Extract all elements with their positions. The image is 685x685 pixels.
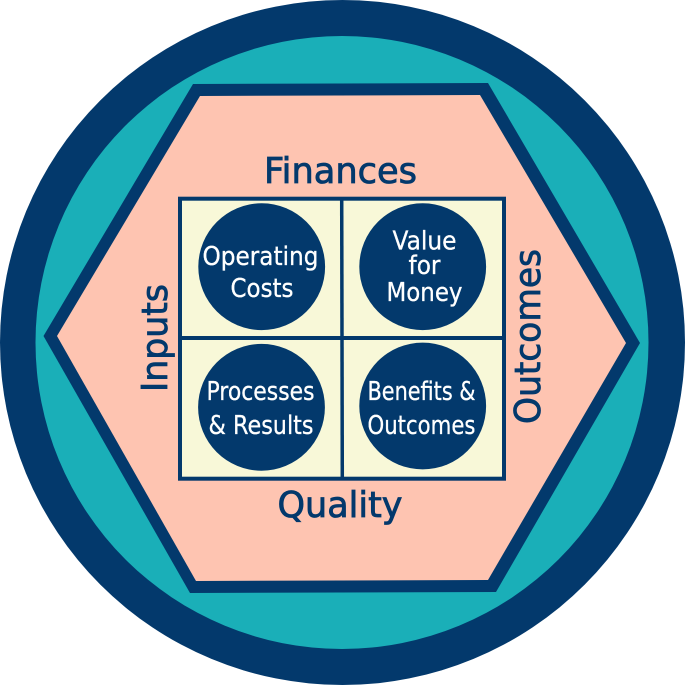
quadrant: Benefits & Outcomes: Outcomes — [368, 411, 476, 441]
quadrant: Benefits & Outcomes: Benefits & — [368, 377, 476, 407]
heading: Finances: Finances — [264, 151, 417, 192]
hexagon border — [44, 83, 640, 593]
quadrant: Operating Costs — [198, 203, 325, 330]
quadrant: Processes & Results — [198, 344, 325, 471]
quadrant: Processes & Results: & Results — [208, 411, 314, 441]
quadrant: Processes & Results: Processes — [206, 377, 314, 407]
quadrant: Value for Money — [359, 203, 486, 330]
quadrant: Operating Costs: Costs — [230, 274, 294, 304]
quadrant: Operating Costs: Operating — [202, 242, 318, 272]
quadrant: Benefits & Outcomes — [359, 343, 486, 469]
heading: Inputs: Inputs — [135, 284, 176, 392]
quadrant: Value for Money: Money — [386, 278, 462, 308]
heading: Outcomes: Outcomes — [508, 249, 549, 424]
quadrant: Value for Money: Value — [392, 226, 456, 256]
hexagon panel — [57, 95, 626, 581]
quadrant: Value for Money: for — [408, 251, 441, 281]
grid of four quadrants — [180, 199, 504, 479]
heading: Quality: Quality — [278, 485, 402, 526]
